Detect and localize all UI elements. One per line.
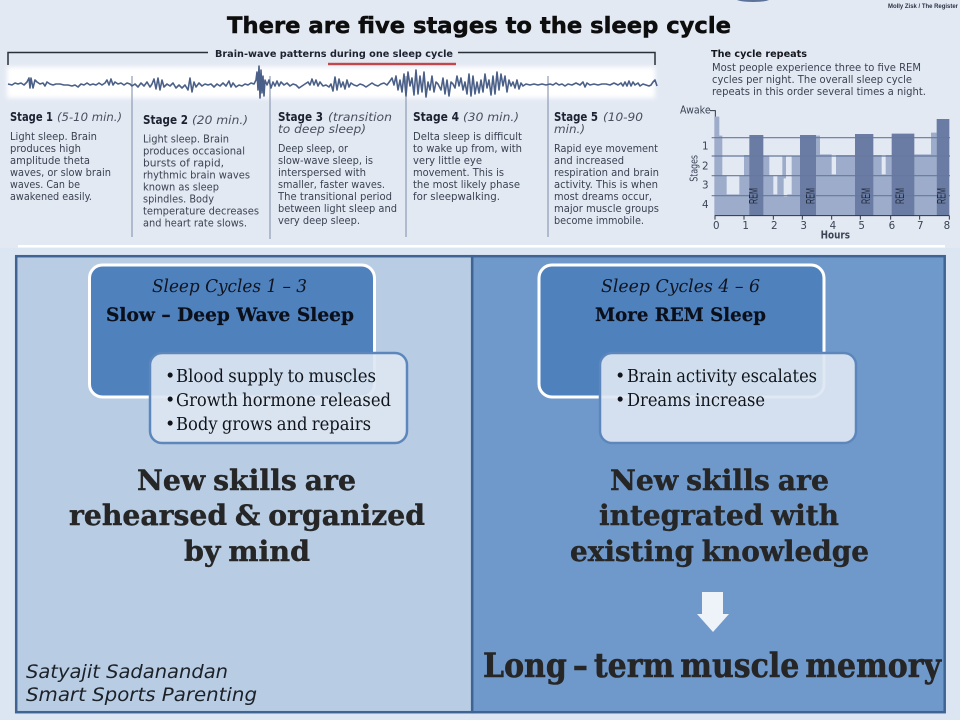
subtitle: Sleep Cycles 1 – 3 — [152, 276, 307, 297]
text block: stage 5: Rapid eye movement — [554, 143, 658, 155]
axis labels: 8 — [944, 220, 950, 232]
credit: Molly Zisk / The Register — [888, 4, 959, 10]
main message — [69, 464, 425, 568]
text block: stage 3: Deep sleep, or — [278, 143, 349, 155]
text block: stage 1: produces high — [10, 143, 81, 155]
stage grid lines — [712, 138, 950, 196]
bullets: Growth hormone released — [176, 391, 391, 411]
main message: integrated with — [599, 499, 839, 532]
text block: stage 5: Stage 5 — [554, 110, 598, 124]
axis labels: Stages — [688, 155, 700, 182]
bullets: Dreams increase — [627, 391, 765, 411]
text block: stage 1: amplitude theta — [10, 155, 90, 167]
REM bars — [749, 119, 949, 216]
header box — [90, 265, 374, 397]
axis labels: 0 — [713, 220, 720, 232]
REM labels: REM — [935, 188, 949, 204]
text block: stage 3: smaller, faster waves. — [278, 179, 385, 191]
text block: stage 4: movement. This is — [413, 167, 504, 179]
arrow: down — [697, 592, 729, 632]
text block: stage 1: Stage 1 — [10, 110, 53, 124]
text block: stage 2 — [143, 113, 259, 230]
bullets: Blood supply to muscles — [176, 367, 376, 387]
text block: stage 5 — [554, 110, 659, 227]
REM labels: REM — [747, 188, 761, 204]
panel: brain-wave chart — [7, 49, 657, 239]
chart: sleep stages over hours — [680, 104, 950, 242]
main message: existing knowledge — [570, 535, 869, 568]
text block: stage 4 — [413, 110, 522, 203]
bullet box — [150, 353, 407, 443]
text block: stage 1: Light sleep. Brain — [10, 131, 97, 143]
bullets: • — [615, 391, 625, 411]
axis labels: 2 — [702, 160, 709, 172]
bullets: • — [165, 415, 175, 435]
text block: the cycle repeats: repeats in this order several times a night. — [712, 86, 926, 98]
text block: stage 4: to wake up from, with — [413, 143, 522, 155]
author credit — [26, 661, 257, 706]
text block: stage 5: most dreams occur, — [554, 191, 652, 203]
text block: the cycle repeats: The cycle repeats — [711, 49, 807, 60]
text block: the cycle repeats: cycles per night. The overall sleep cycle — [712, 74, 912, 86]
brain-wave trace — [8, 66, 657, 98]
text block: stage 2: and heart rate slows. — [143, 218, 247, 230]
bullet box — [600, 353, 856, 443]
axis labels: 6 — [889, 220, 895, 232]
text block: stage 1: (5-10 min.) — [57, 110, 122, 124]
text block: the cycle repeats — [711, 49, 926, 98]
axis labels: 1 — [742, 220, 749, 232]
main message: by mind — [184, 535, 310, 568]
text block: stage 5: (10-90 — [603, 110, 643, 124]
text block: stage 3: slow-wave sleep, is — [278, 155, 373, 167]
axis labels: 4 — [702, 199, 709, 211]
text block: stage 3: interspersed with — [278, 167, 366, 179]
text block: stage 2: spindles. Body — [143, 194, 214, 206]
REM labels: REM — [893, 188, 907, 204]
subtitle: Sleep Cycles 4 – 6 — [601, 276, 760, 297]
text block: stage 2: (20 min.) — [192, 113, 248, 127]
text block: stage 1: waves, or slow brain — [10, 167, 111, 179]
axis labels: 5 — [858, 220, 865, 232]
bullets — [615, 367, 817, 411]
axis labels: Hours — [821, 230, 850, 242]
axis labels: 2 — [771, 220, 778, 232]
text block: stage 2: bursts of rapid, — [143, 158, 224, 170]
text block: stage 3: (transition — [328, 110, 392, 124]
REM labels: REM — [859, 188, 873, 204]
text block: stage 5: become immobile. — [554, 215, 644, 227]
axis labels: 7 — [917, 220, 924, 232]
text block: stage 2: Light sleep. Brain — [143, 134, 229, 146]
text block: stage 5: respiration and brain — [554, 167, 659, 179]
REM labels — [747, 188, 949, 204]
header box — [539, 265, 824, 397]
panel: sleep cycles 4-6 — [472, 256, 945, 712]
bullets: Body grows and repairs — [176, 415, 371, 435]
axis labels: 4 — [830, 220, 836, 232]
main message: New skills are — [137, 464, 356, 497]
text block: stage 4: Stage 4 — [413, 110, 459, 124]
stage area — [714, 117, 937, 216]
text block: stage 1: awakened easily. — [10, 191, 92, 203]
text block: stage 3: very deep sleep. — [278, 215, 360, 227]
red highlight line — [328, 63, 456, 65]
text block: stage 2: rhythmic brain waves — [143, 170, 250, 182]
REM labels: REM — [804, 188, 818, 204]
text block: stage 5: min.) — [554, 122, 585, 136]
text block: stage 5: major muscle groups — [554, 203, 659, 215]
text block: stage 3: The transitional period — [277, 191, 392, 203]
title: There are five stages to the sleep cycle — [227, 13, 731, 39]
bullets: • — [165, 391, 175, 411]
panel: sleep cycles 1-3 — [16, 256, 472, 712]
text block: the cycle repeats: Most people experience three to five REM — [712, 62, 921, 74]
text block: stage 3: between light sleep and — [278, 203, 397, 215]
bullets: Brain activity escalates — [627, 367, 817, 387]
text block: stage 4: for sleepwalking. — [413, 191, 500, 203]
bullets: • — [165, 367, 175, 387]
text block: stage 3: to deep sleep) — [278, 122, 366, 136]
main message: rehearsed & organized — [69, 499, 425, 532]
main message: New skills are — [610, 464, 829, 497]
text block: stage 2: temperature decreases — [143, 206, 259, 218]
text block: stage 5: and increased — [554, 155, 624, 167]
text block: stage 4: (30 min.) — [463, 110, 519, 124]
main message — [570, 464, 869, 568]
author credit: Satyajit Sadanandan — [26, 661, 228, 683]
bullets — [165, 367, 391, 435]
text block: stage 3: Stage 3 — [278, 110, 323, 124]
text block: stage 5: activity. This is when — [554, 179, 658, 191]
text block: stage 4: very little eye — [413, 155, 482, 167]
text block: stage 2: produces occasional — [143, 146, 245, 158]
text block: stage 3 — [277, 110, 397, 227]
axis labels: Awake — [680, 104, 711, 116]
text block: stage 1 — [10, 110, 122, 203]
text block: stage 4: the most likely phase — [413, 179, 520, 191]
bullets: • — [615, 367, 625, 387]
text block: stage 2: known as sleep — [143, 182, 219, 194]
text block: stage 1: waves. Can be — [10, 179, 80, 191]
author credit: Smart Sports Parenting — [26, 684, 257, 706]
axes — [710, 111, 949, 220]
axis labels: 1 — [702, 141, 709, 153]
axis labels — [680, 104, 950, 242]
heading: Slow – Deep Wave Sleep — [106, 305, 354, 326]
brain-wave heading: Brain-wave patterns during one sleep cycle — [215, 49, 453, 60]
text block: stage 4: Delta sleep is difficult — [413, 131, 522, 143]
stage dividers — [132, 76, 548, 239]
top decorative blob — [736, 0, 770, 2]
heading: More REM Sleep — [595, 305, 766, 326]
text block: stage 2: Stage 2 — [143, 113, 188, 127]
axis labels: 3 — [800, 220, 807, 232]
axis labels: 3 — [702, 180, 709, 192]
